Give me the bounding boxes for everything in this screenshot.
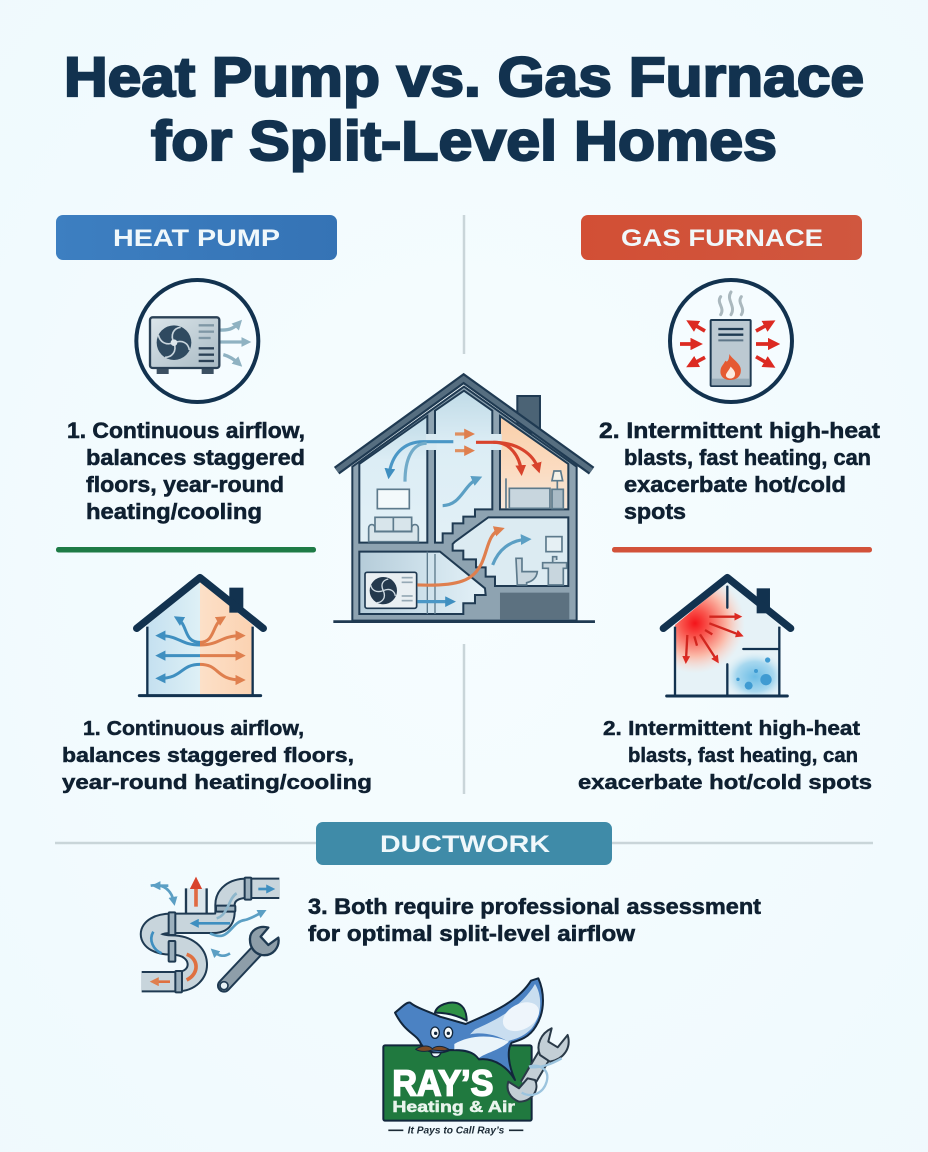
- heading: gas furnace: [581, 215, 862, 260]
- text: heat pump point 1: floors, year-round: [86, 472, 284, 497]
- heading: ductwork: DUCTWORK: [380, 831, 550, 858]
- heading: gas furnace: GAS FURNACE: [621, 225, 823, 252]
- rooms: [359, 391, 568, 614]
- title: [64, 45, 864, 172]
- icon: house with hot and cold spots: [660, 574, 794, 698]
- title: for Split-Level Homes: [151, 109, 777, 172]
- logo: Ray's Heating & Air: [383, 978, 569, 1137]
- text: heat pump point 1: 1. Continuous airflow,: [67, 418, 305, 443]
- heading: heat pump: HEAT PUMP: [113, 225, 280, 252]
- wrench wrap: [522, 1058, 562, 1095]
- icon: house with balanced airflow: [137, 578, 263, 696]
- icon: heat pump outdoor unit: [136, 280, 258, 402]
- wall openings: [426, 434, 502, 450]
- tagline: It Pays to Call Ray’s: [408, 1126, 505, 1137]
- chimney: [517, 396, 540, 433]
- stingray mascot: [395, 978, 544, 1080]
- ground line: [333, 618, 595, 626]
- text: gas furnace point 2: exacerbate hot/cold: [624, 472, 846, 497]
- bathroom fixtures: [516, 537, 567, 585]
- house shell: [352, 387, 577, 621]
- text: ductwork point 3: [308, 894, 762, 946]
- heading: ductwork: [316, 822, 612, 865]
- text: gas furnace point 2 repeated: [578, 717, 872, 794]
- text: ductwork point 3: for optimal split-level airflow: [308, 921, 636, 946]
- icon: ductwork and wrench: [142, 878, 279, 992]
- text: heat pump point 1 repeated: [62, 717, 372, 794]
- text: heat pump point 1 repeated: balances staggered floors,: [62, 744, 354, 767]
- text: heat pump point 1 repeated: year-round heating/cooling: [62, 771, 372, 794]
- text: ductwork point 3: 3. Both require professional assessment: [308, 894, 762, 919]
- green sign: [383, 1045, 532, 1121]
- text: gas furnace point 2: 2. Intermittent high-heat: [599, 418, 881, 443]
- logo: Ray's Heating & Air: Heating & Air: [392, 1099, 515, 1116]
- text: gas furnace point 2: spots: [624, 499, 686, 524]
- heading: heat pump: [56, 215, 337, 260]
- text: heat pump point 1: [67, 418, 305, 524]
- text: gas furnace point 2 repeated: 2. Intermittent high-heat: [603, 717, 860, 740]
- title: Heat Pump vs. Gas Furnace: [64, 45, 864, 108]
- text: gas furnace point 2 repeated: exacerbate hot/cold spots: [578, 771, 872, 794]
- airflow arrows: [389, 434, 538, 602]
- text: gas furnace point 2: [599, 418, 881, 524]
- living room furniture: [369, 489, 418, 542]
- wrench: [220, 927, 279, 990]
- text: gas furnace point 2: blasts, fast heating, can: [624, 445, 871, 470]
- text: heat pump point 1: balances staggered: [86, 445, 305, 470]
- text: heat pump point 1 repeated: 1. Continuous airflow,: [83, 717, 304, 740]
- text: gas furnace point 2 repeated: blasts, fast heating, can: [628, 744, 858, 767]
- text: heat pump point 1: heating/cooling: [86, 499, 262, 524]
- sign text: RAY’S: [392, 1062, 493, 1103]
- icon: gas furnace: [670, 280, 792, 402]
- roof: [337, 379, 592, 471]
- wrench: [508, 1028, 569, 1102]
- bedroom furniture: [506, 471, 563, 509]
- outdoor unit: [365, 572, 417, 608]
- central split-level house cutaway: [333, 379, 595, 622]
